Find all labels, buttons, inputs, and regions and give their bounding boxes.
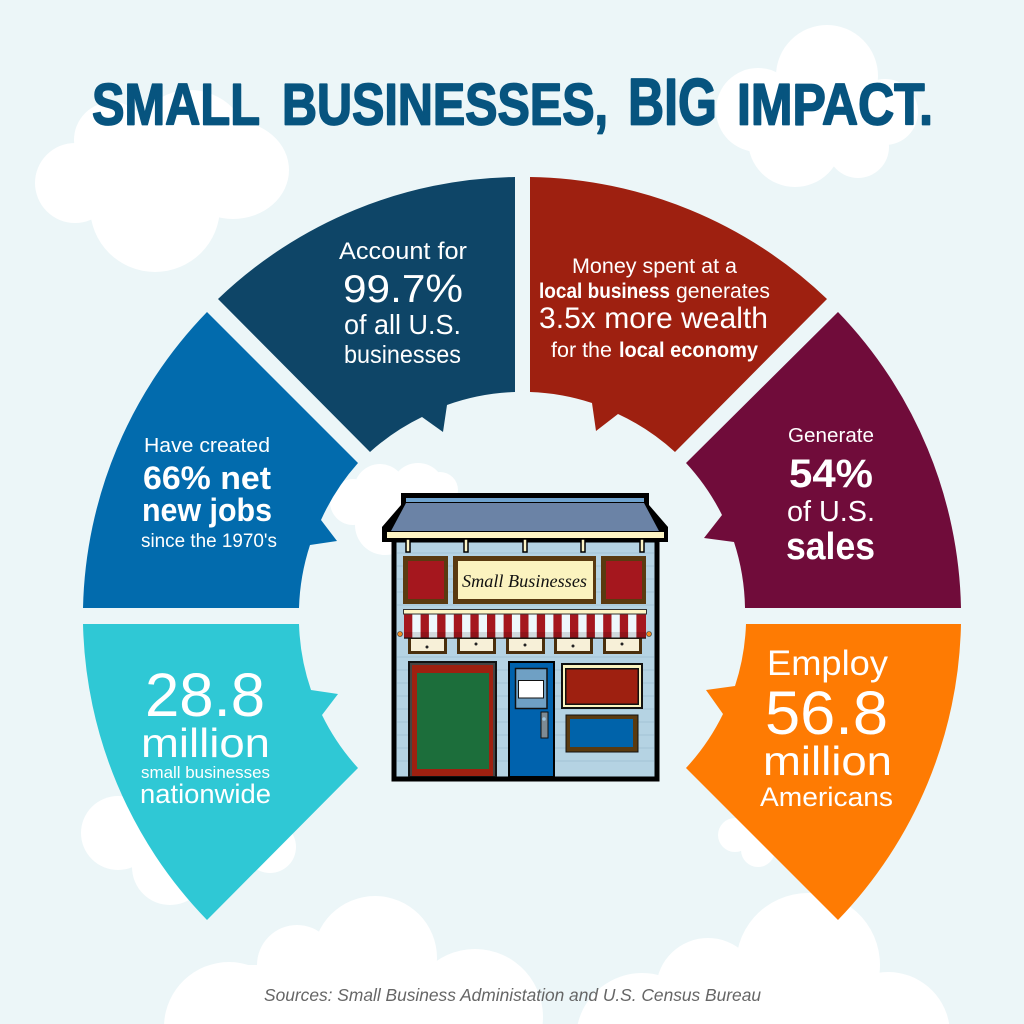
panel: 56.8 million employed [686, 624, 961, 920]
navy segment text: Account for [339, 238, 467, 265]
blue segment text: Have created [144, 435, 270, 457]
panel: 66% net new jobs [83, 312, 358, 608]
cloud: top left [35, 90, 289, 272]
upper right window [601, 556, 646, 604]
red segment text: local economy [619, 339, 758, 362]
purple segment text [786, 425, 875, 568]
green door [408, 661, 497, 777]
navy segment text [339, 238, 467, 369]
orange segment text: million [763, 738, 892, 784]
purple segment text: Generate [788, 425, 874, 447]
teal segment text: 28.8 [145, 661, 265, 729]
red segment text [539, 255, 770, 362]
orange segment text: 56.8 [765, 679, 888, 747]
cloud: bottom right [578, 893, 949, 1024]
panel: 99.7% of businesses [218, 177, 515, 452]
title: SMALL [92, 72, 260, 138]
navy segment text: of all U.S. [344, 309, 461, 340]
blue segment shape [83, 312, 358, 608]
panel: 28.8 million businesses [83, 624, 358, 920]
blue window [566, 715, 638, 752]
blue segment text [141, 435, 277, 552]
cloud: behind shop [330, 463, 458, 555]
red segment text: Money spent at a [572, 255, 737, 278]
shop body [394, 540, 657, 779]
teal segment text: million [141, 720, 270, 766]
purple segment text: of U.S. [787, 496, 875, 528]
upper left window [403, 556, 448, 604]
navy segment text: businesses [344, 341, 461, 369]
red segment shape [530, 177, 827, 452]
red segment text: local business [539, 280, 670, 303]
teal segment text [140, 661, 271, 809]
blue segment text: 66% net [143, 460, 271, 496]
orange segment text: Employ [767, 644, 889, 683]
title: BIG [628, 64, 717, 138]
panel: local wealth [530, 177, 827, 452]
orange segment text [760, 644, 893, 812]
teal segment text: nationwide [140, 779, 271, 809]
navy segment shape [218, 177, 515, 452]
small windows under awning [408, 636, 642, 654]
icon: storefront [382, 493, 668, 779]
purple segment shape [686, 312, 961, 608]
cloud: lower left [81, 796, 296, 905]
purple segment text: 54% [789, 452, 873, 496]
awning [398, 610, 652, 639]
purple segment text: sales [786, 526, 875, 568]
title [92, 64, 933, 138]
cloud: lower right [718, 818, 775, 867]
red window [561, 663, 643, 709]
roof brackets [406, 539, 644, 552]
red segment text: generates [676, 280, 770, 303]
roof [382, 493, 668, 542]
red segment text: for the [551, 339, 612, 362]
sources: Sources: Small Business Administation and U.S. Census Bureau [264, 985, 761, 1005]
shop sign: Small Businesses [462, 571, 587, 591]
cloud: top right [716, 25, 918, 187]
teal segment shape [83, 624, 358, 920]
panel: 54% of sales [686, 312, 961, 608]
orange segment shape [686, 624, 961, 920]
orange segment text: Americans [760, 782, 893, 812]
title: IMPACT. [737, 72, 933, 138]
red segment text: 3.5x more wealth [539, 302, 768, 335]
blue segment text: since the 1970's [141, 531, 277, 552]
shop sign [453, 556, 596, 604]
blue segment text: new jobs [142, 492, 272, 528]
blue door [509, 662, 554, 777]
title: BUSINESSES, [282, 72, 608, 138]
cloud: bottom left [164, 896, 543, 1024]
navy segment text: 99.7% [343, 268, 463, 311]
teal segment text: small businesses [141, 763, 270, 782]
